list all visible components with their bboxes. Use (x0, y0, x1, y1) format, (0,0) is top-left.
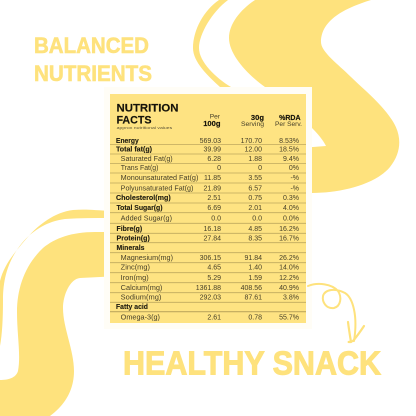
background shape: main swirl bottom left (0, 232, 120, 416)
row: energy: 569.03 (200, 138, 221, 145)
row: fibre: 16.2% (279, 226, 299, 233)
row: magnesium: 91.84 (244, 255, 262, 262)
row: zinc: 14.0% (279, 264, 299, 272)
row: monounsaturated fat: -% (290, 175, 299, 182)
row: protein: 16.7% (279, 236, 299, 242)
row: zinc: 4.65 (207, 264, 221, 272)
row: saturated fat: 6.28 (207, 156, 221, 163)
row: added sugar: 0.0 (252, 216, 262, 222)
row: protein: 8.35 (248, 236, 262, 242)
row: calcium: 40.9% (279, 285, 299, 292)
row: protein: Protein(g) (116, 236, 150, 242)
row: zinc (121, 264, 299, 272)
column header: percent RDA (275, 115, 302, 128)
table title: FACTS (116, 115, 152, 127)
row: polyunsaturated fat: 21.89 (203, 186, 221, 193)
row: monounsaturated fat (121, 175, 299, 182)
background shape: thin ribbon top (193, 0, 231, 87)
heading: healthy snack: HEALTHY SNACK (123, 345, 381, 382)
column header: per 100g: 100g (203, 119, 221, 128)
row: cholesterol: Cholesterol(mg) (116, 195, 171, 202)
table title: NUTRITION (116, 103, 178, 115)
row: polyunsaturated fat: Polyunsaturated Fat(g) (121, 186, 193, 193)
heading: balanced nutrients: BALANCED (34, 33, 149, 58)
column header: per 100g: Per (210, 114, 221, 120)
row: calcium: 408.56 (241, 285, 262, 292)
row: monounsaturated fat: 3.55 (248, 175, 262, 182)
column header: 30g serving (241, 113, 264, 128)
row: total fat: 39.99 (203, 146, 221, 154)
row: saturated fat: 9.4% (283, 156, 299, 163)
row: sodium (121, 294, 299, 302)
row: total sugar: Total Sugar(g) (116, 205, 162, 212)
row: zinc: 1.40 (248, 264, 262, 272)
row: iron: 1.59 (248, 275, 262, 282)
row: polyunsaturated fat (121, 186, 299, 193)
row: magnesium: Magnesium(mg) (121, 255, 173, 262)
row: saturated fat (121, 156, 299, 163)
row: protein (116, 236, 299, 242)
row: total sugar (116, 205, 299, 212)
row: magnesium: 26.2% (279, 255, 299, 262)
row: sodium: 87.61 (244, 294, 262, 302)
row: cholesterol: 0.75 (248, 195, 262, 202)
row: polyunsaturated fat: -% (290, 186, 299, 193)
row: energy: 170.70 (241, 138, 262, 145)
row: iron: 5.29 (207, 275, 221, 282)
row: added sugar (121, 216, 299, 222)
heading: balanced nutrients: NUTRIENTS (34, 61, 152, 86)
row: trans fat: 0 (217, 165, 221, 172)
row: magnesium: 306.15 (200, 255, 221, 262)
row: polyunsaturated fat: 6.57 (248, 186, 262, 193)
row: monounsaturated fat: Monounsaturated Fat(g) (121, 175, 198, 182)
row: total fat: 18.5% (279, 146, 299, 154)
row: fatty acid heading: Fatty acid (116, 304, 148, 311)
row: sodium: 292.03 (200, 294, 221, 302)
row: total fat: 12.00 (244, 146, 262, 154)
table title (116, 103, 178, 130)
row: sodium: Sodium(mg) (121, 294, 161, 302)
row: added sugar: 0.0% (283, 216, 299, 222)
panel: nutrition facts table (110, 94, 306, 323)
background shape: thin ribbon bottom left (0, 210, 110, 346)
panel: nutrition card border (104, 87, 312, 329)
column header: percent RDA: %RDA (279, 115, 300, 122)
background shape: white notch beside card (300, 118, 326, 148)
row: fibre: Fibre(g) (116, 226, 142, 233)
row: omega-3 (121, 314, 299, 322)
row: total sugar: 6.69 (207, 205, 221, 212)
row: iron (121, 275, 299, 282)
column header: 30g serving: Serving (241, 121, 264, 128)
row: cholesterol: 0.3% (283, 195, 299, 202)
arrow: hand-drawn loop arrow (308, 284, 364, 342)
row: trans fat: Trans Fat(g) (121, 165, 158, 172)
column header: percent RDA: Per Serv. (275, 121, 302, 128)
row: fibre: 4.85 (248, 226, 262, 233)
row: energy (116, 138, 299, 145)
row: added sugar: Added Sugar(g) (121, 216, 172, 222)
row: protein: 27.84 (203, 236, 221, 242)
row: total fat: Total fat(g) (116, 146, 152, 154)
row: energy: 8.53% (279, 138, 299, 145)
row: sodium: 3.8% (283, 294, 299, 302)
row: minerals heading: Minerals (116, 245, 145, 252)
row: iron: 12.2% (279, 275, 299, 282)
row: saturated fat: Saturated Fat(g) (121, 156, 173, 163)
row: fibre (116, 226, 299, 233)
row: cholesterol (116, 195, 299, 202)
row: zinc: Zinc(mg) (121, 264, 150, 272)
row: trans fat: 0 (258, 165, 262, 172)
row: calcium: 1361.88 (196, 285, 221, 292)
row: total sugar: 4.0% (283, 205, 299, 212)
row: saturated fat: 1.88 (248, 156, 262, 163)
row: cholesterol: 2.51 (207, 195, 221, 202)
row: energy: Energy (116, 138, 139, 145)
row: omega-3: 55.7% (279, 314, 299, 322)
row: fibre: 16.18 (203, 226, 221, 233)
row: total fat (116, 146, 299, 154)
row: calcium (121, 285, 299, 292)
row: trans fat: 0% (289, 165, 299, 172)
background shape: large swirl top right (229, 0, 399, 200)
row: calcium: Calcium(mg) (121, 285, 162, 292)
row: magnesium (121, 255, 299, 262)
row: iron: Iron(mg) (121, 275, 149, 282)
row: added sugar: 0.0 (211, 216, 221, 222)
row: omega-3: Omega-3(g) (121, 314, 160, 322)
table title: approx nutritional values (117, 125, 172, 130)
row: trans fat (121, 165, 299, 172)
column header: 30g serving: 30g (251, 113, 264, 122)
row: omega-3: 0.78 (248, 314, 262, 322)
heading: balanced nutrients (34, 33, 152, 86)
column header: per 100g (203, 114, 221, 128)
row: omega-3: 2.61 (207, 314, 221, 322)
row: monounsaturated fat: 11.85 (204, 175, 221, 182)
row: total sugar: 2.01 (248, 205, 262, 212)
